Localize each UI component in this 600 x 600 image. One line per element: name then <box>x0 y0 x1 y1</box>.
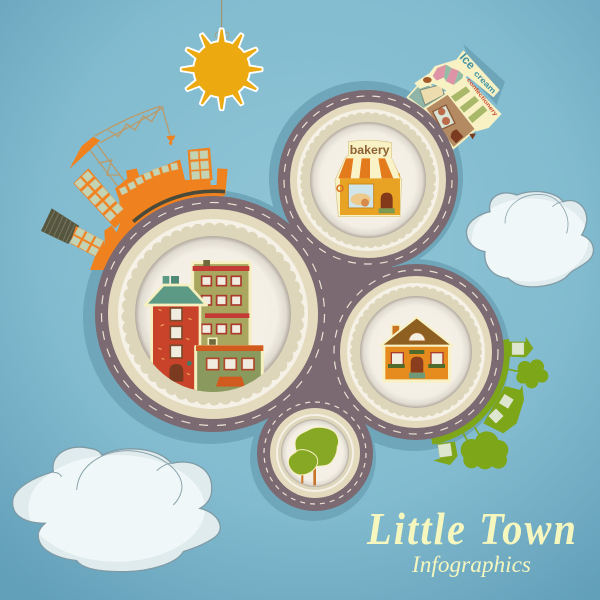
windows <box>70 150 210 256</box>
crane <box>90 106 170 186</box>
road dashes <box>102 96 498 504</box>
green band <box>416 339 510 445</box>
green long house <box>483 385 524 433</box>
ring: big circle <box>108 209 318 419</box>
bakery shop <box>335 140 402 217</box>
green apartment block <box>193 260 250 396</box>
ring: right circle <box>340 276 492 428</box>
ring: top circle <box>290 102 446 258</box>
road: right circle <box>328 264 504 440</box>
green house and window <box>508 337 533 357</box>
road: top circle <box>278 90 458 270</box>
green tree right <box>508 359 548 388</box>
road shadows <box>83 81 510 521</box>
dark road kerb <box>133 191 225 222</box>
ice cream sign <box>457 50 498 96</box>
cloud: lower left <box>12 446 221 572</box>
subtitle: Infographics <box>411 552 531 577</box>
green house bottom <box>433 442 458 465</box>
trees <box>288 427 339 485</box>
green neighbourhood <box>416 337 548 469</box>
olive front building <box>196 338 263 397</box>
ice cream and confectionery shops <box>407 44 505 148</box>
dark tower <box>41 208 79 244</box>
ice cream sign: cream <box>472 69 498 96</box>
red brick building <box>145 276 207 397</box>
big circle buildings <box>145 260 263 397</box>
title <box>366 503 578 577</box>
shop shadow <box>463 44 505 105</box>
orange buildings <box>70 148 228 270</box>
road network <box>95 90 504 511</box>
confectionery sign: confectionery <box>465 78 499 118</box>
road junction <box>213 180 416 453</box>
green tree bottom <box>461 427 508 469</box>
ice cream shop <box>407 50 499 115</box>
bakery awning <box>337 158 400 178</box>
cloud: right <box>466 190 594 288</box>
cottage <box>381 317 453 382</box>
orange city and crane <box>41 106 228 270</box>
sun <box>182 0 262 109</box>
bakery sign: bakery <box>350 143 390 157</box>
ice cream sign: Ice <box>457 50 479 72</box>
bakery window <box>348 184 374 208</box>
ring: small circle <box>270 408 360 498</box>
road: small circle <box>257 395 373 511</box>
road: big circle <box>95 196 331 432</box>
